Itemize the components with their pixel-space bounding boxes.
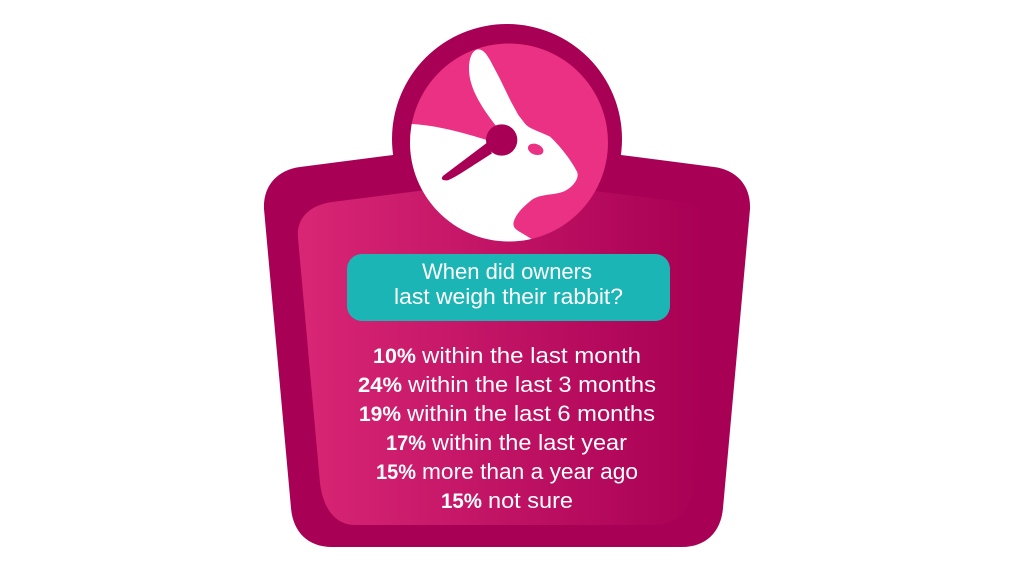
results list [358, 343, 656, 513]
question text: last weigh their rabbit? [394, 284, 623, 309]
result: not sure [441, 488, 573, 513]
result: not sure: 15% [441, 489, 482, 513]
result: within the last 6 months: within the last 6 months [406, 401, 655, 426]
infographic [264, 24, 750, 547]
icon: rabbit eye [528, 144, 544, 155]
dial face [410, 44, 608, 242]
icon: dial needle [442, 124, 517, 180]
result: within the last 3 months: 24% [358, 373, 402, 397]
scale inner panel [298, 190, 716, 525]
result: more than a year ago: 15% [376, 460, 416, 484]
icon: rabbit [410, 49, 578, 242]
result: within the last month: 10% [373, 344, 416, 368]
result: within the last year: 17% [386, 431, 426, 455]
question text: When did owners [422, 259, 592, 284]
result: not sure: not sure [488, 488, 573, 513]
question text [394, 259, 623, 309]
dial rim [392, 24, 622, 254]
result: within the last month: within the last month [421, 343, 641, 368]
result: within the last 6 months: 19% [359, 402, 401, 426]
result: within the last year: within the last year [431, 430, 628, 455]
scale body [264, 155, 750, 547]
question box [347, 254, 670, 321]
result: more than a year ago: more than a year ago [422, 459, 638, 484]
result: within the last 3 months: within the last 3 months [407, 372, 656, 397]
